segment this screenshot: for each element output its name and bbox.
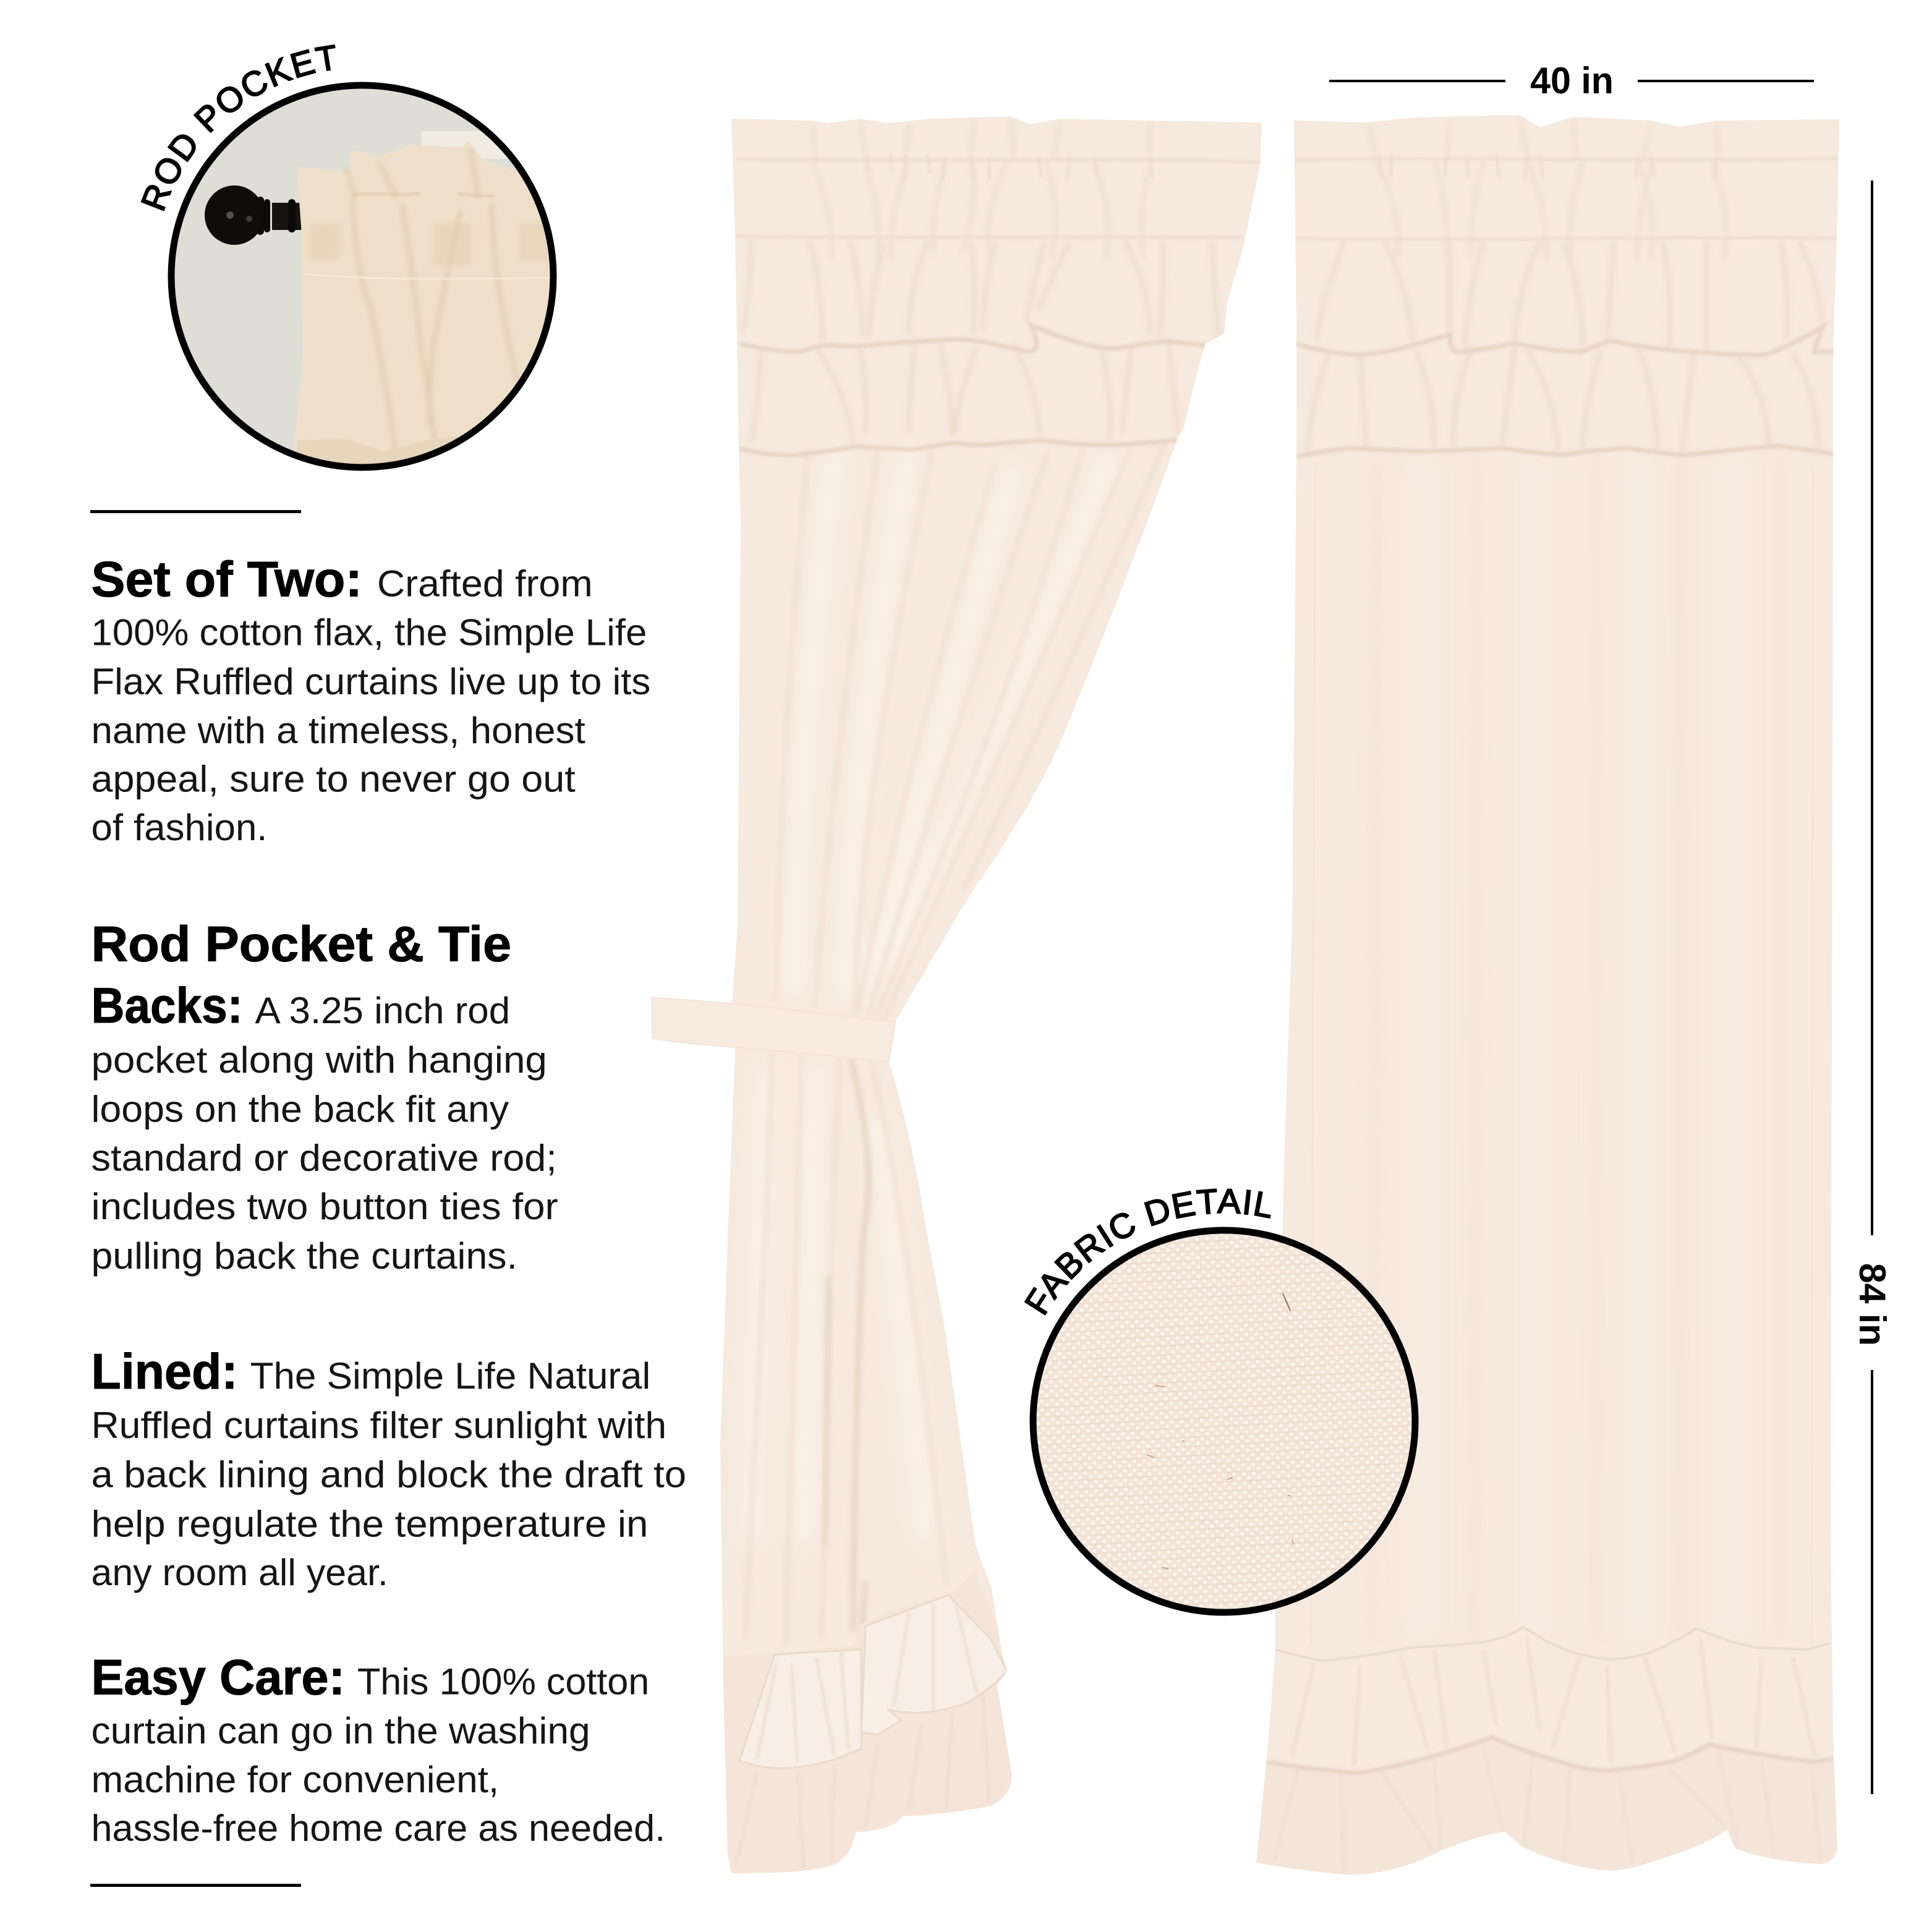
header pleats (1368, 117, 1726, 260)
panel: rod pocket detail (141, 45, 556, 471)
circle outline (1033, 1230, 1415, 1612)
divider top (90, 510, 301, 513)
text block: easy care: machine for convenient, (91, 1759, 499, 1800)
woven texture (1026, 1224, 1422, 1620)
text block: easy care (91, 1649, 665, 1849)
tan lining bands (309, 223, 550, 266)
lower ruffle section (1249, 1735, 1845, 1879)
text block: set of two: Set of Two: (91, 552, 362, 608)
text block: lined (91, 1344, 686, 1593)
text block: rod pocket and tie backs: standard or decorative rod; (91, 1137, 557, 1178)
text block: lined: Ruffled curtains filter sunlight with (91, 1405, 666, 1446)
pocket and header pleats (812, 121, 1150, 260)
stray fibres (1147, 1293, 1293, 1569)
text block: rod pocket and tie backs: pocket along with hanging (91, 1039, 547, 1081)
lower ruffle fold lines (1274, 1638, 1821, 1870)
lower ruffle fold lines (756, 1602, 978, 1762)
top rod pocket seam (735, 159, 1260, 237)
lower ruffle front flaps (739, 1649, 861, 1768)
text block: lined: The Simple Life Natural (250, 1355, 650, 1397)
text block: rod pocket and tie backs: Rod Pocket & Tie (91, 917, 511, 972)
wall (167, 80, 563, 476)
text block: rod pocket and tie backs: A 3.25 inch rod (255, 990, 510, 1031)
lower ruffle seam (1275, 1627, 1831, 1661)
gather stitch (303, 274, 550, 279)
text block: set of two: appeal, sure to never go out (91, 759, 576, 800)
lower ruffle (297, 427, 532, 482)
text block: set of two: name with a timeless, honest (91, 710, 585, 751)
gather wrinkles (1379, 155, 1716, 181)
lower ruffle section (723, 1622, 1011, 1873)
text block: easy care: hassle-free home care as needed. (91, 1808, 665, 1849)
divider bottom (90, 1884, 301, 1887)
dimension: width 40 in: 40 in (1530, 60, 1614, 101)
text block: rod pocket and tie backs: includes two button ties for (91, 1186, 558, 1227)
ruffle pleats (1308, 242, 1821, 451)
dimension: width 40 in (1329, 60, 1814, 101)
curtain rod (272, 203, 310, 230)
text block: rod pocket and tie backs (91, 917, 558, 1277)
text block: easy care: curtain can go in the washing (91, 1710, 590, 1751)
text block: set of two: of fashion. (91, 807, 267, 848)
tie back strap (652, 997, 895, 1062)
window trim (422, 131, 533, 159)
text block: set of two (91, 552, 650, 848)
pleats (346, 148, 532, 451)
text block: rod pocket and tie backs: pulling back the curtains. (91, 1235, 517, 1277)
photo inside circle (167, 80, 563, 482)
rod pocket seams (1295, 158, 1837, 239)
text block: lined: any room all year. (91, 1552, 388, 1593)
text block: rod pocket and tie backs: loops on the back fit any (91, 1089, 509, 1130)
top gather wrinkles (352, 193, 495, 197)
upper ruffle shadows (739, 325, 1220, 455)
curtain silhouette (1256, 115, 1839, 1875)
panel: fabric detail (1024, 1188, 1418, 1616)
panel: right full curtain (1249, 115, 1845, 1879)
gather wrinkles (866, 155, 1152, 181)
curved label: ROD POCKET (141, 45, 336, 211)
curtain silhouette (720, 116, 1262, 1873)
text block: lined: a back lining and block the draft to (91, 1454, 686, 1496)
lower ruffle shadow (1267, 1737, 1833, 1773)
upper ruffle pleats (742, 240, 1218, 442)
curtain fabric (294, 140, 556, 482)
text block: set of two: Flax Ruffled curtains live up to its (91, 661, 650, 702)
finial ball (205, 185, 264, 245)
text block: rod pocket and tie backs: Backs: (91, 978, 243, 1034)
circle outline (171, 85, 553, 467)
text block: set of two: Crafted from (377, 563, 593, 605)
curtain shading and folds (720, 121, 1260, 1876)
text block: lined: Lined: (91, 1344, 238, 1400)
curtain folds and ruffles (1249, 117, 1845, 1879)
text block: lined: help regulate the temperature in (91, 1503, 648, 1544)
dimension: height 84 in: 84 in (1852, 1263, 1893, 1346)
text block: easy care: This 100% cotton (357, 1661, 649, 1702)
dimension: height 84 in (1852, 181, 1893, 1794)
text block: set of two: 100% cotton flax, the Simple Life (91, 611, 647, 653)
text column (91, 552, 686, 1849)
ruffle edges (1295, 326, 1836, 456)
panel: left tied-back curtain (652, 116, 1262, 1876)
text block: easy care: Easy Care: (91, 1649, 345, 1705)
curved label: FABRIC DETAIL (1024, 1188, 1271, 1316)
